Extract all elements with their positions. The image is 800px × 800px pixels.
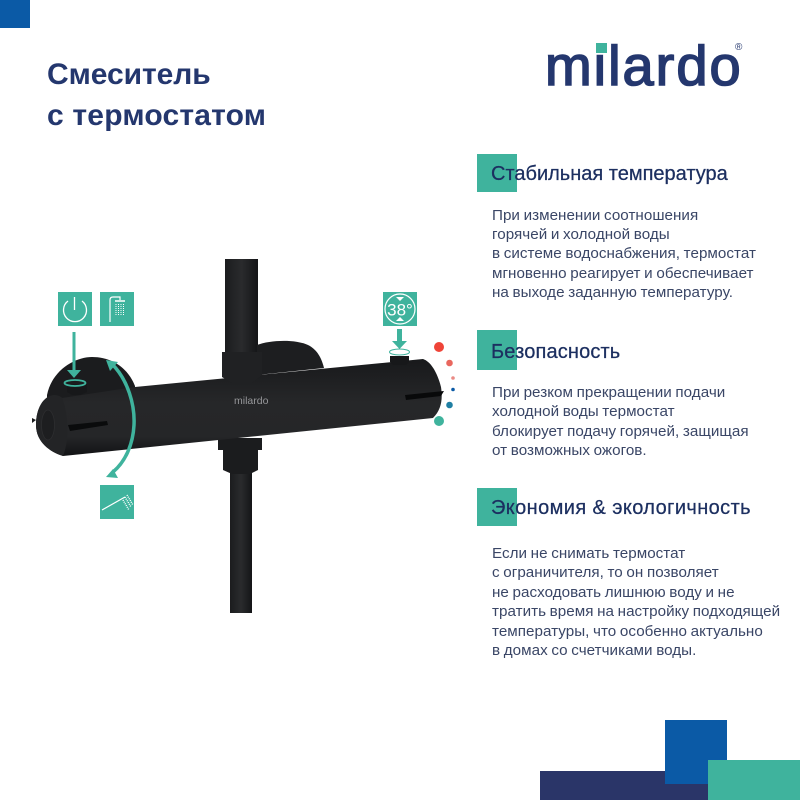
corner blocks bottom right [540,720,800,800]
body text: температуры, что особенно актуально [492,623,763,640]
right lever [405,391,444,400]
section 2: safety [477,330,749,459]
body text: в домах со счетчиками воды. [492,642,696,659]
teal block [708,760,800,800]
title [47,58,266,132]
right wall plate [257,341,324,375]
icon: hand shower [100,485,134,519]
logo: milardo: ® [735,42,742,52]
arrow: curved rotation [106,360,134,478]
navy bar [540,771,710,800]
arrow: temperature down [390,329,410,355]
heading: Стабильная температура [491,163,728,185]
logo: milardo: milardo [545,34,743,96]
icon: 38 degrees: 38° [387,300,413,320]
section 1: stable temperature [477,154,756,301]
mixer body group [32,259,444,613]
left lever slot [68,421,108,431]
blue square [665,720,727,784]
heading: Экономия & экологичность [491,497,751,519]
icon: overhead shower [100,292,134,326]
arrow: power button down [64,332,86,386]
body text: При изменении соотношения [492,206,698,224]
body text: не расходовать лишнюю воду и не [492,584,735,601]
title: Смеситель [47,58,211,91]
shower pipe [225,259,258,359]
marker square [477,330,517,370]
title: с термостатом [47,99,266,132]
body text: с ограничителя, то он позволяет [492,564,719,581]
section 3: economy and ecology [477,488,780,659]
body text [492,384,749,459]
main cylinder [36,359,442,456]
left wall plate [47,357,135,410]
marker square [477,488,517,526]
marker square [477,154,517,192]
logo on body: milardo [234,395,269,407]
body text [492,545,780,659]
body text: холодной воды термостат [492,403,675,420]
body text: на выходе заданную температуру. [492,284,733,301]
icon: power [58,292,92,326]
heading: Безопасность [491,341,620,363]
body text [492,206,756,301]
icon: 38 degrees [383,292,417,326]
body text: Если не снимать термостат [492,545,685,562]
logo accent dot [596,42,606,52]
temperature dots [434,342,455,426]
body text: блокирует подачу горячей, защищая [492,423,749,440]
body text: горячей и холодной воды [492,226,670,243]
body text: от возможных ожогов. [492,442,647,459]
body text: в системе водоснабжения, термостат [492,245,756,262]
left knob [67,384,87,395]
body text: тратить время на настройку подходящей [492,603,780,620]
lower hose [230,465,252,613]
pipe collar [222,352,262,383]
end cap [36,395,67,456]
lower nut [218,438,262,474]
body text: мгновенно реагирует и обеспечивает [492,265,754,282]
corner accent square [0,0,30,28]
right knob [390,356,409,365]
body text: При резком прекращении подачи [492,384,725,401]
